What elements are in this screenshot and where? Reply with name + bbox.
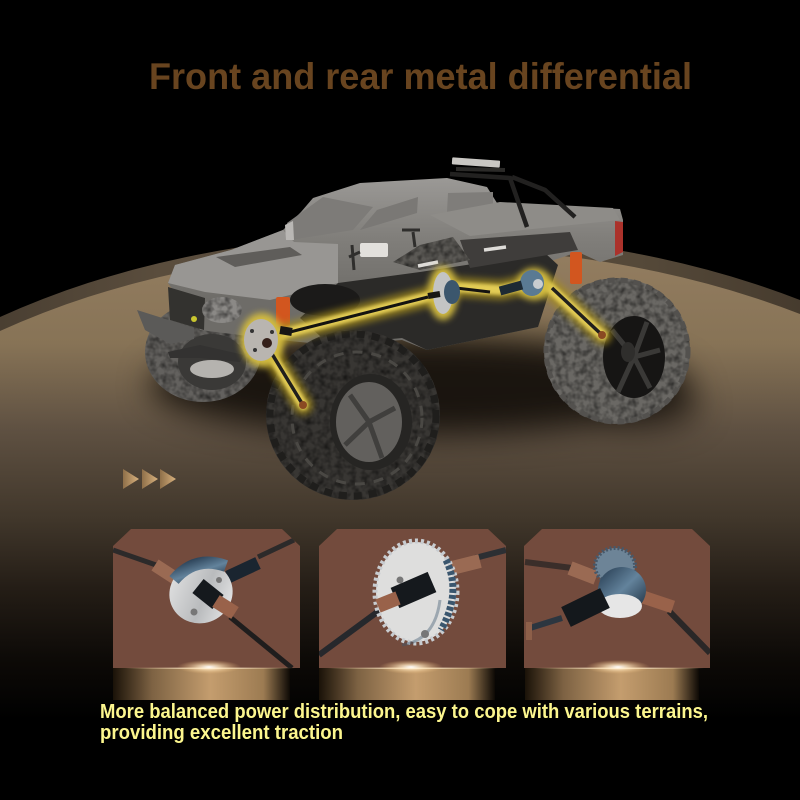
- tail light: [615, 221, 623, 256]
- windshield: [287, 197, 373, 240]
- light flare 2: [328, 660, 498, 674]
- hood: [168, 230, 338, 300]
- rear side window: [447, 192, 493, 212]
- gold glow strip 2: [319, 668, 495, 700]
- front half shaft: [266, 344, 303, 405]
- panel: differential view 2: [319, 529, 506, 668]
- fog light: [191, 316, 197, 322]
- far front wheel: [145, 302, 261, 402]
- mirror stalk: [349, 230, 420, 270]
- front bumper: [137, 310, 194, 344]
- roll bar: [450, 174, 575, 227]
- gold glow strip 1: [113, 668, 290, 700]
- light flare 1: [125, 660, 295, 674]
- truck body: [137, 157, 623, 362]
- light bar: [452, 157, 505, 170]
- side mirror: [360, 243, 388, 257]
- panel: differential view 1: [113, 529, 300, 668]
- thumbnail background 1: [113, 529, 300, 668]
- caption text: More balanced power distribution, easy to cope with various terrains,: [100, 701, 708, 723]
- engine cavity: [290, 284, 360, 316]
- differential part 1: [113, 540, 294, 668]
- highlighted drivetrain glow: [240, 266, 606, 409]
- panel: differential view 3: [524, 529, 710, 668]
- light flare 3: [534, 660, 704, 674]
- hood scoop: [216, 247, 302, 267]
- title: Front and rear metal differential: [149, 56, 692, 97]
- rear differential: [500, 270, 544, 296]
- front differential: [244, 319, 292, 361]
- truck illustration: [100, 157, 710, 744]
- headlight detail: [202, 297, 242, 323]
- main drive shaft: [290, 297, 428, 332]
- front grille: [168, 287, 205, 330]
- front side window: [360, 197, 418, 230]
- interior chassis detail: [393, 237, 470, 270]
- front rim: [330, 374, 412, 470]
- rear rim: [603, 316, 665, 398]
- front shock: [276, 297, 290, 327]
- truck bed: [430, 202, 620, 236]
- lower dark body panel: [300, 253, 558, 350]
- gold glow strip 3: [525, 668, 699, 700]
- thumbnail background 3: [524, 529, 710, 668]
- bumper strut: [168, 345, 244, 362]
- thumbnail background 2: [319, 529, 506, 668]
- front wheel: [266, 330, 440, 500]
- A pillar light: [285, 221, 294, 240]
- rear drive shaft: [456, 288, 490, 292]
- wheel hub ends: [299, 331, 606, 409]
- door handles: [418, 247, 506, 266]
- rear interior shadow: [460, 232, 578, 268]
- caption text: providing excellent traction: [100, 722, 343, 744]
- curved stage floor: [0, 233, 800, 730]
- triple arrow marker: [123, 469, 176, 489]
- rear shock: [570, 252, 582, 284]
- caption text: [100, 701, 708, 744]
- rear wheel: [544, 278, 690, 424]
- rear half shaft: [552, 288, 602, 335]
- ground shadow under truck: [150, 335, 700, 435]
- differential part 2: [319, 541, 506, 655]
- centre differential: [428, 272, 460, 314]
- differential part 3: [525, 548, 710, 653]
